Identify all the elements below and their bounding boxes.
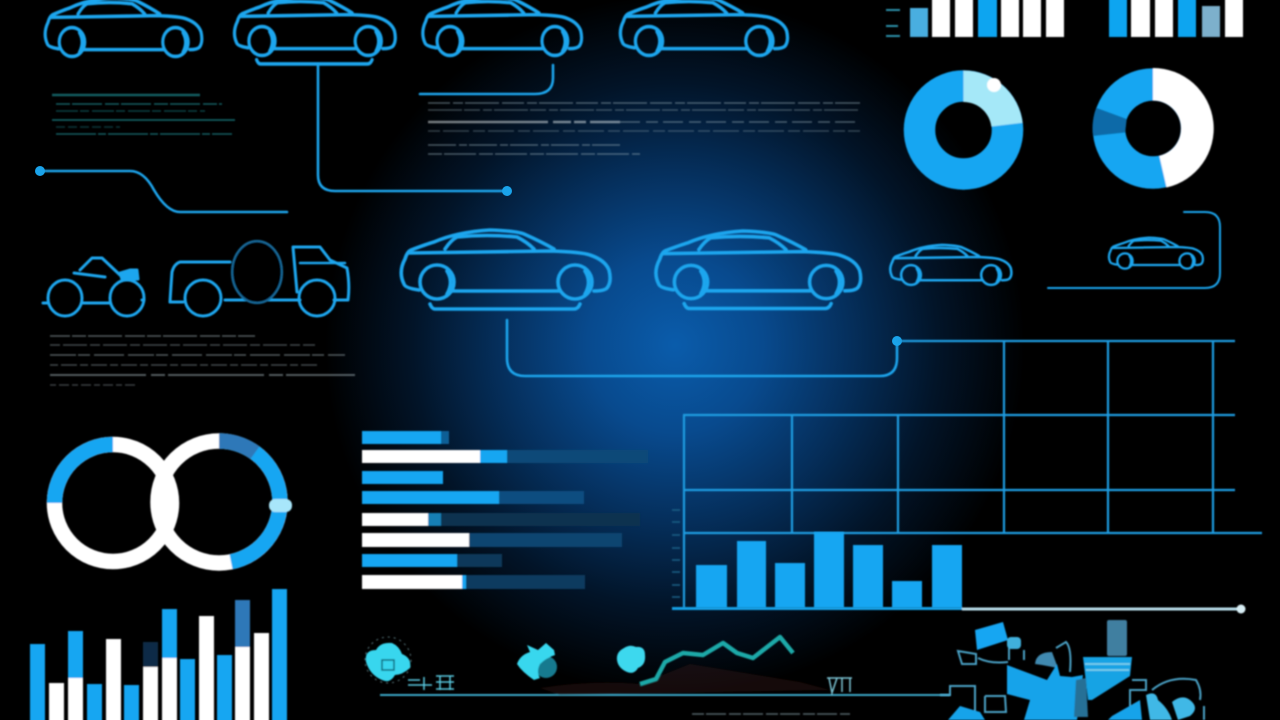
donut chart 1 — [920, 70, 1023, 174]
blue panel top — [975, 622, 1008, 650]
car outline 1 — [45, 0, 202, 56]
donut chart 2 — [1093, 68, 1214, 188]
top bar charts — [886, 0, 1243, 37]
area under line — [540, 664, 830, 695]
small car — [1109, 238, 1203, 269]
horizontal progress bars — [362, 431, 648, 589]
lower blobs — [948, 706, 985, 720]
small glyphs right — [827, 678, 852, 693]
bottom right machinery illustration — [940, 620, 1204, 720]
car outline 2 — [234, 0, 395, 64]
infinity ring gauge — [54, 441, 292, 563]
motorcycle outline — [43, 258, 144, 316]
connector from car 3 — [420, 65, 553, 94]
progress bar 3 — [362, 471, 443, 484]
car outline 4 — [620, 0, 788, 55]
connector dots — [35, 166, 902, 346]
bar group 2 — [1109, 0, 1243, 37]
progress bar 7 — [362, 554, 502, 567]
left step connector — [40, 171, 287, 212]
connector from car 2 — [318, 65, 507, 191]
icon: dashed cloud badge — [365, 637, 411, 683]
timeline baseline — [380, 694, 950, 696]
text block: upper centre — [428, 103, 860, 154]
large centre car 1 — [401, 230, 610, 309]
progress bar 8 — [362, 575, 585, 589]
ring marker — [269, 499, 292, 512]
progress bar 5 — [362, 513, 640, 526]
outlined pipes — [940, 642, 1204, 720]
large centre car 2 — [656, 231, 861, 308]
progress bar 1 — [362, 431, 449, 444]
teal line chart — [640, 637, 793, 684]
central blue glow — [300, 0, 1060, 720]
grid table — [672, 341, 1262, 608]
top row of car outlines — [45, 0, 787, 64]
cylinder — [1083, 657, 1132, 700]
bottom timeline — [365, 637, 950, 714]
small tank — [1007, 637, 1021, 649]
text block: upper left — [52, 95, 235, 134]
car outline 3 — [423, 0, 582, 55]
right ring — [158, 441, 280, 563]
bottom left bar chart — [30, 589, 287, 720]
central connector — [507, 320, 897, 376]
pickup truck outline — [170, 241, 349, 316]
icon: blob — [617, 646, 645, 673]
medium car — [890, 245, 1011, 285]
left ring — [54, 444, 172, 562]
progress bar 6 — [362, 533, 622, 547]
text block: middle left — [50, 336, 355, 385]
column chart in grid — [696, 532, 962, 608]
icon: splash and sphere — [517, 643, 557, 680]
progress bar 4 — [362, 491, 584, 504]
small label glyphs — [408, 676, 454, 690]
caption — [692, 713, 850, 715]
bar group 1 ticks — [886, 10, 900, 36]
chimney — [1107, 620, 1127, 656]
chart axis — [672, 604, 1246, 614]
progress bar 2 — [362, 450, 648, 463]
bar group 1 — [910, 0, 1064, 37]
dome — [1035, 652, 1058, 668]
connector from small car — [1048, 212, 1220, 288]
main block — [1007, 664, 1083, 720]
middle row of large cars — [401, 230, 1203, 309]
connector lines — [40, 65, 1220, 376]
